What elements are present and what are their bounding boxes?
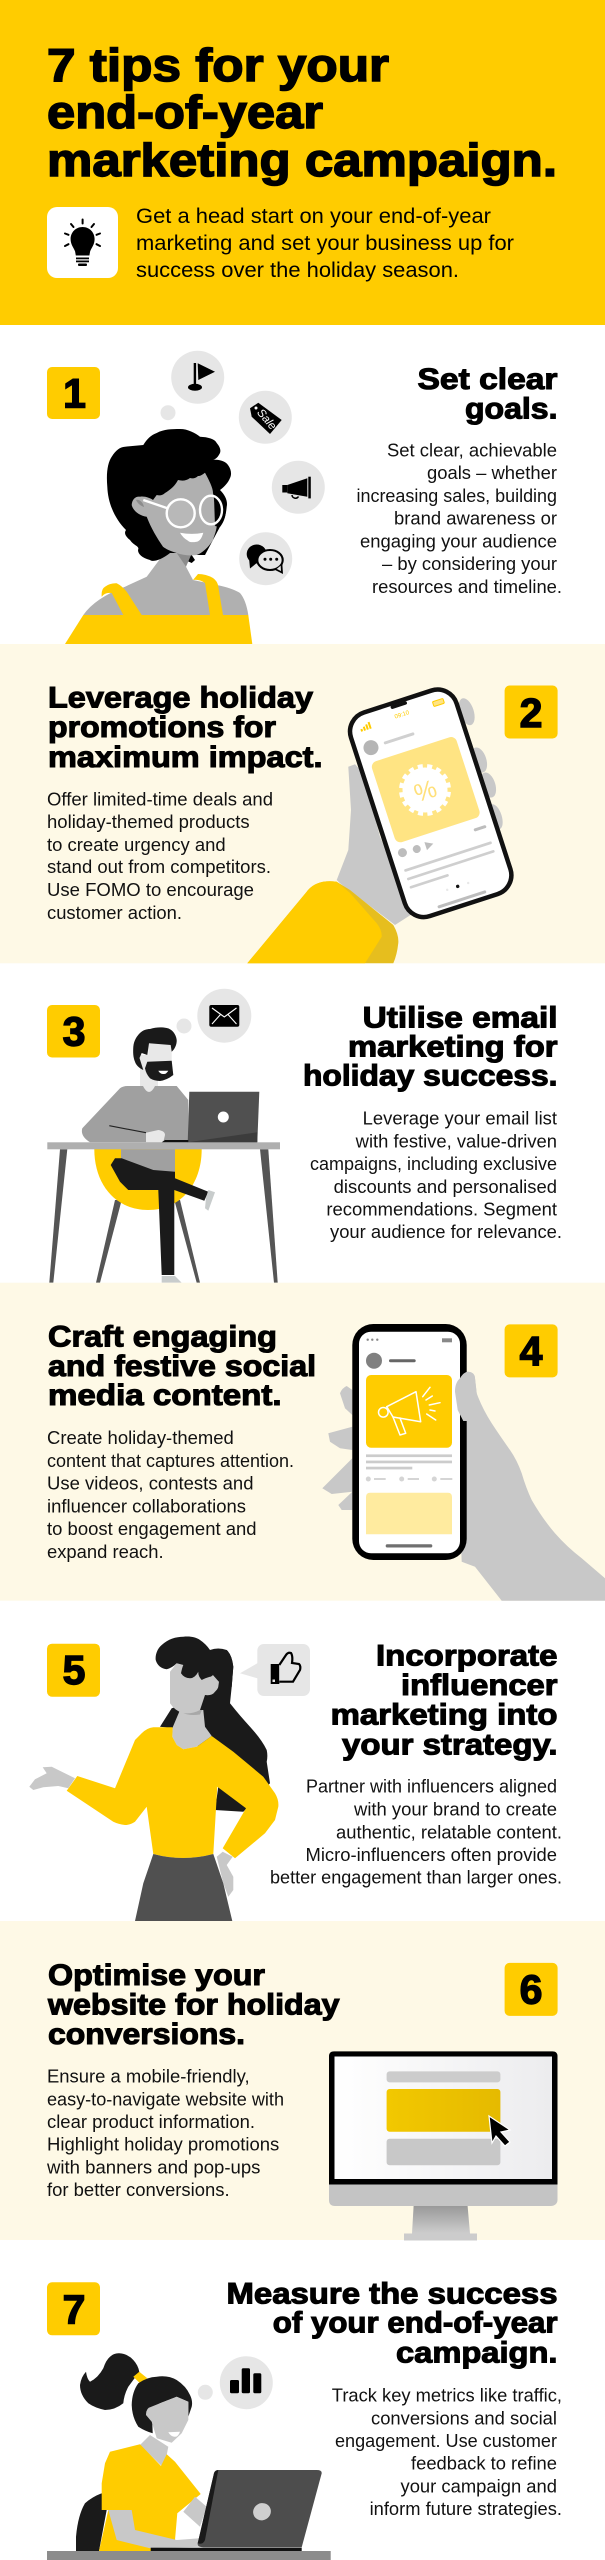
body text 4: content that captures attention. [47, 1451, 294, 1471]
number badge 2 [505, 686, 558, 738]
heading 3: holiday success. [303, 1060, 558, 1093]
body text 6: Highlight holiday promotions [47, 2135, 279, 2155]
panel: tip 5 influencer marketing [29, 1636, 562, 1921]
body text 7: conversions and social [371, 2408, 557, 2428]
heading 7: of your end-of-year [273, 2307, 558, 2340]
body text 4: to boost engagement and [47, 1519, 257, 1539]
icon: email bubble [197, 989, 251, 1043]
body text 3: your audience for relevance. [330, 1222, 562, 1242]
heading 5 [331, 1639, 558, 1761]
body text 1: Set clear, achievable [387, 440, 557, 460]
panel: header [0, 0, 605, 325]
heading 7 [226, 2277, 558, 2370]
heading 4 [48, 1320, 316, 1412]
number badge 7: 7 [63, 2286, 85, 2332]
heading 7: Measure the success [226, 2277, 558, 2310]
body text 6: with banners and pop-ups [46, 2158, 260, 2178]
body text 5 [270, 1777, 562, 1888]
icon: bar chart bubble [220, 2356, 273, 2409]
body text 7: feedback to refine [411, 2453, 557, 2473]
intro text [136, 205, 514, 282]
body text 2 [47, 790, 273, 923]
number badge 6 [505, 1963, 558, 2016]
heading 2: Leverage holiday [48, 682, 313, 714]
body text 2: Offer limited-time deals and [47, 790, 273, 810]
heading 1 [418, 363, 558, 426]
illustration: woman in yellow sweater [29, 1636, 278, 1921]
heading 2: maximum impact. [48, 741, 322, 774]
body text 1: brand awareness or [394, 509, 557, 529]
heading 4: Craft engaging [48, 1320, 277, 1354]
heading 3 [303, 1002, 558, 1093]
number badge 3: 3 [63, 1008, 85, 1054]
body text 6: for better conversions. [47, 2180, 230, 2200]
icon: small thought bubble [176, 1018, 192, 1034]
body text 3 [310, 1109, 562, 1242]
heading 1: goals. [465, 392, 558, 426]
heading 5: marketing into [331, 1698, 558, 1732]
heading 3: marketing for [348, 1030, 558, 1063]
heading 6: conversions. [48, 2018, 245, 2051]
body text 7: your campaign and [400, 2476, 557, 2496]
body text 7: Track key metrics like traffic, [332, 2386, 562, 2406]
intro text: success over the holiday season. [136, 259, 459, 282]
icon: flag bubble [171, 351, 224, 404]
body text 3: discounts and personalised [334, 1177, 557, 1197]
intro text: marketing and set your business up for [136, 232, 514, 255]
number badge 6: 6 [520, 1966, 542, 2012]
heading 7: campaign. [396, 2337, 558, 2370]
body text 6: Ensure a mobile-friendly, [47, 2066, 250, 2086]
body text 5: better engagement than larger ones. [270, 1868, 562, 1888]
illustration: woman with ponytail at laptop [47, 2353, 331, 2560]
icon: sale tag bubble [239, 391, 292, 444]
heading 6 [47, 1959, 340, 2051]
heading 6: website for holiday [47, 1988, 340, 2021]
illustration: hand holding phone with megaphone post [322, 1324, 605, 1601]
heading 2 [48, 682, 322, 774]
panel: tip 3 email marketing [47, 989, 562, 1283]
intro text: Get a head start on your end-of-year [136, 205, 491, 228]
body text 7: inform future strategies. [370, 2499, 562, 2519]
body text 1: increasing sales, building [356, 486, 557, 506]
panel: tip 6 website conversions [0, 1921, 605, 2240]
body text 2: to create urgency and [47, 835, 226, 855]
body text 6: easy-to-navigate website with [47, 2089, 284, 2109]
number badge 3 [47, 1005, 100, 1058]
number badge 5: 5 [63, 1647, 85, 1693]
heading 2: promotions for [48, 711, 276, 744]
body text 2: holiday-themed products [47, 812, 250, 832]
body text 1: resources and timeline. [372, 577, 562, 597]
body text 3: with festive, value-driven [355, 1132, 557, 1152]
body text 4: influencer collaborations [47, 1496, 246, 1516]
heading 5: your strategy. [342, 1728, 558, 1761]
title [47, 39, 557, 186]
illustration: hand holding phone with offer [247, 684, 517, 963]
number badge 1 [47, 367, 100, 419]
illustration: man at desk with laptop [47, 1027, 280, 1283]
heading 1: Set clear [418, 363, 558, 396]
title: marketing campaign. [47, 134, 557, 186]
heading 3: Utilise email [363, 1002, 558, 1034]
heading 4: and festive social [48, 1350, 316, 1383]
body text 7: engagement. Use customer [335, 2431, 557, 2451]
body text 6: clear product information. [47, 2112, 255, 2132]
icon: small thought bubble [160, 405, 176, 420]
panel: tip 7 measure success [47, 2277, 562, 2560]
body text 7 [332, 2386, 562, 2519]
body text 4: expand reach. [47, 1542, 164, 1562]
illustration: hand holding phone with offer: % [411, 775, 440, 808]
body text 1 [356, 440, 562, 597]
icon: megaphone bubble [272, 461, 325, 514]
panel: tip 4 social media content [0, 1283, 605, 1601]
number badge 2: 2 [520, 690, 542, 736]
title: 7 tips for your [47, 39, 389, 91]
body text 2: customer action. [47, 903, 182, 923]
illustration: hand holding phone with offer: 09:10 [394, 710, 411, 721]
number badge 4: 4 [520, 1328, 543, 1374]
body text 1: goals – whether [427, 463, 557, 483]
heading 6: Optimise your [48, 1959, 265, 1992]
heading 4: media content. [48, 1379, 282, 1412]
body text 5: Micro-influencers often provide [306, 1845, 557, 1865]
number badge 1: 1 [63, 370, 86, 416]
body text 2: stand out from competitors. [47, 857, 271, 877]
body text 5: with your brand to create [353, 1800, 557, 1820]
body text 1: – by considering your [382, 554, 557, 574]
number badge 7 [47, 2282, 100, 2335]
title: end-of-year [47, 86, 323, 138]
icon: light bulb [47, 207, 118, 278]
panel: tip 2 holiday promotions [0, 644, 605, 963]
number badge 5 [47, 1644, 100, 1697]
body text 3: campaigns, including exclusive [310, 1154, 557, 1174]
body text 2: Use FOMO to encourage [47, 880, 254, 900]
body text 4: Create holiday-themed [47, 1428, 234, 1448]
icon: thumbs up speech bubble [240, 1644, 310, 1696]
heading 5: influencer [401, 1669, 558, 1702]
body text 5: Partner with influencers aligned [306, 1777, 557, 1797]
body text 6 [46, 2066, 284, 2200]
body text 4 [47, 1428, 294, 1562]
heading 5: Incorporate [376, 1639, 558, 1672]
illustration: woman with glasses [65, 429, 252, 644]
number badge 4 [505, 1324, 558, 1377]
body text 3: Leverage your email list [363, 1109, 557, 1129]
body text 3: recommendations. Segment [326, 1200, 557, 1220]
body text 1: engaging your audience [360, 532, 557, 552]
icon: chat bubble [239, 532, 292, 585]
icon: sale tag bubble: Sale [254, 407, 278, 432]
body text 5: authentic, relatable content. [336, 1822, 562, 1842]
icon: small thought bubble [198, 2385, 213, 2400]
panel: tip 1 set clear goals [47, 351, 562, 644]
illustration: desktop monitor with cursor [329, 2051, 558, 2240]
body text 4: Use videos, contests and [47, 1474, 254, 1494]
